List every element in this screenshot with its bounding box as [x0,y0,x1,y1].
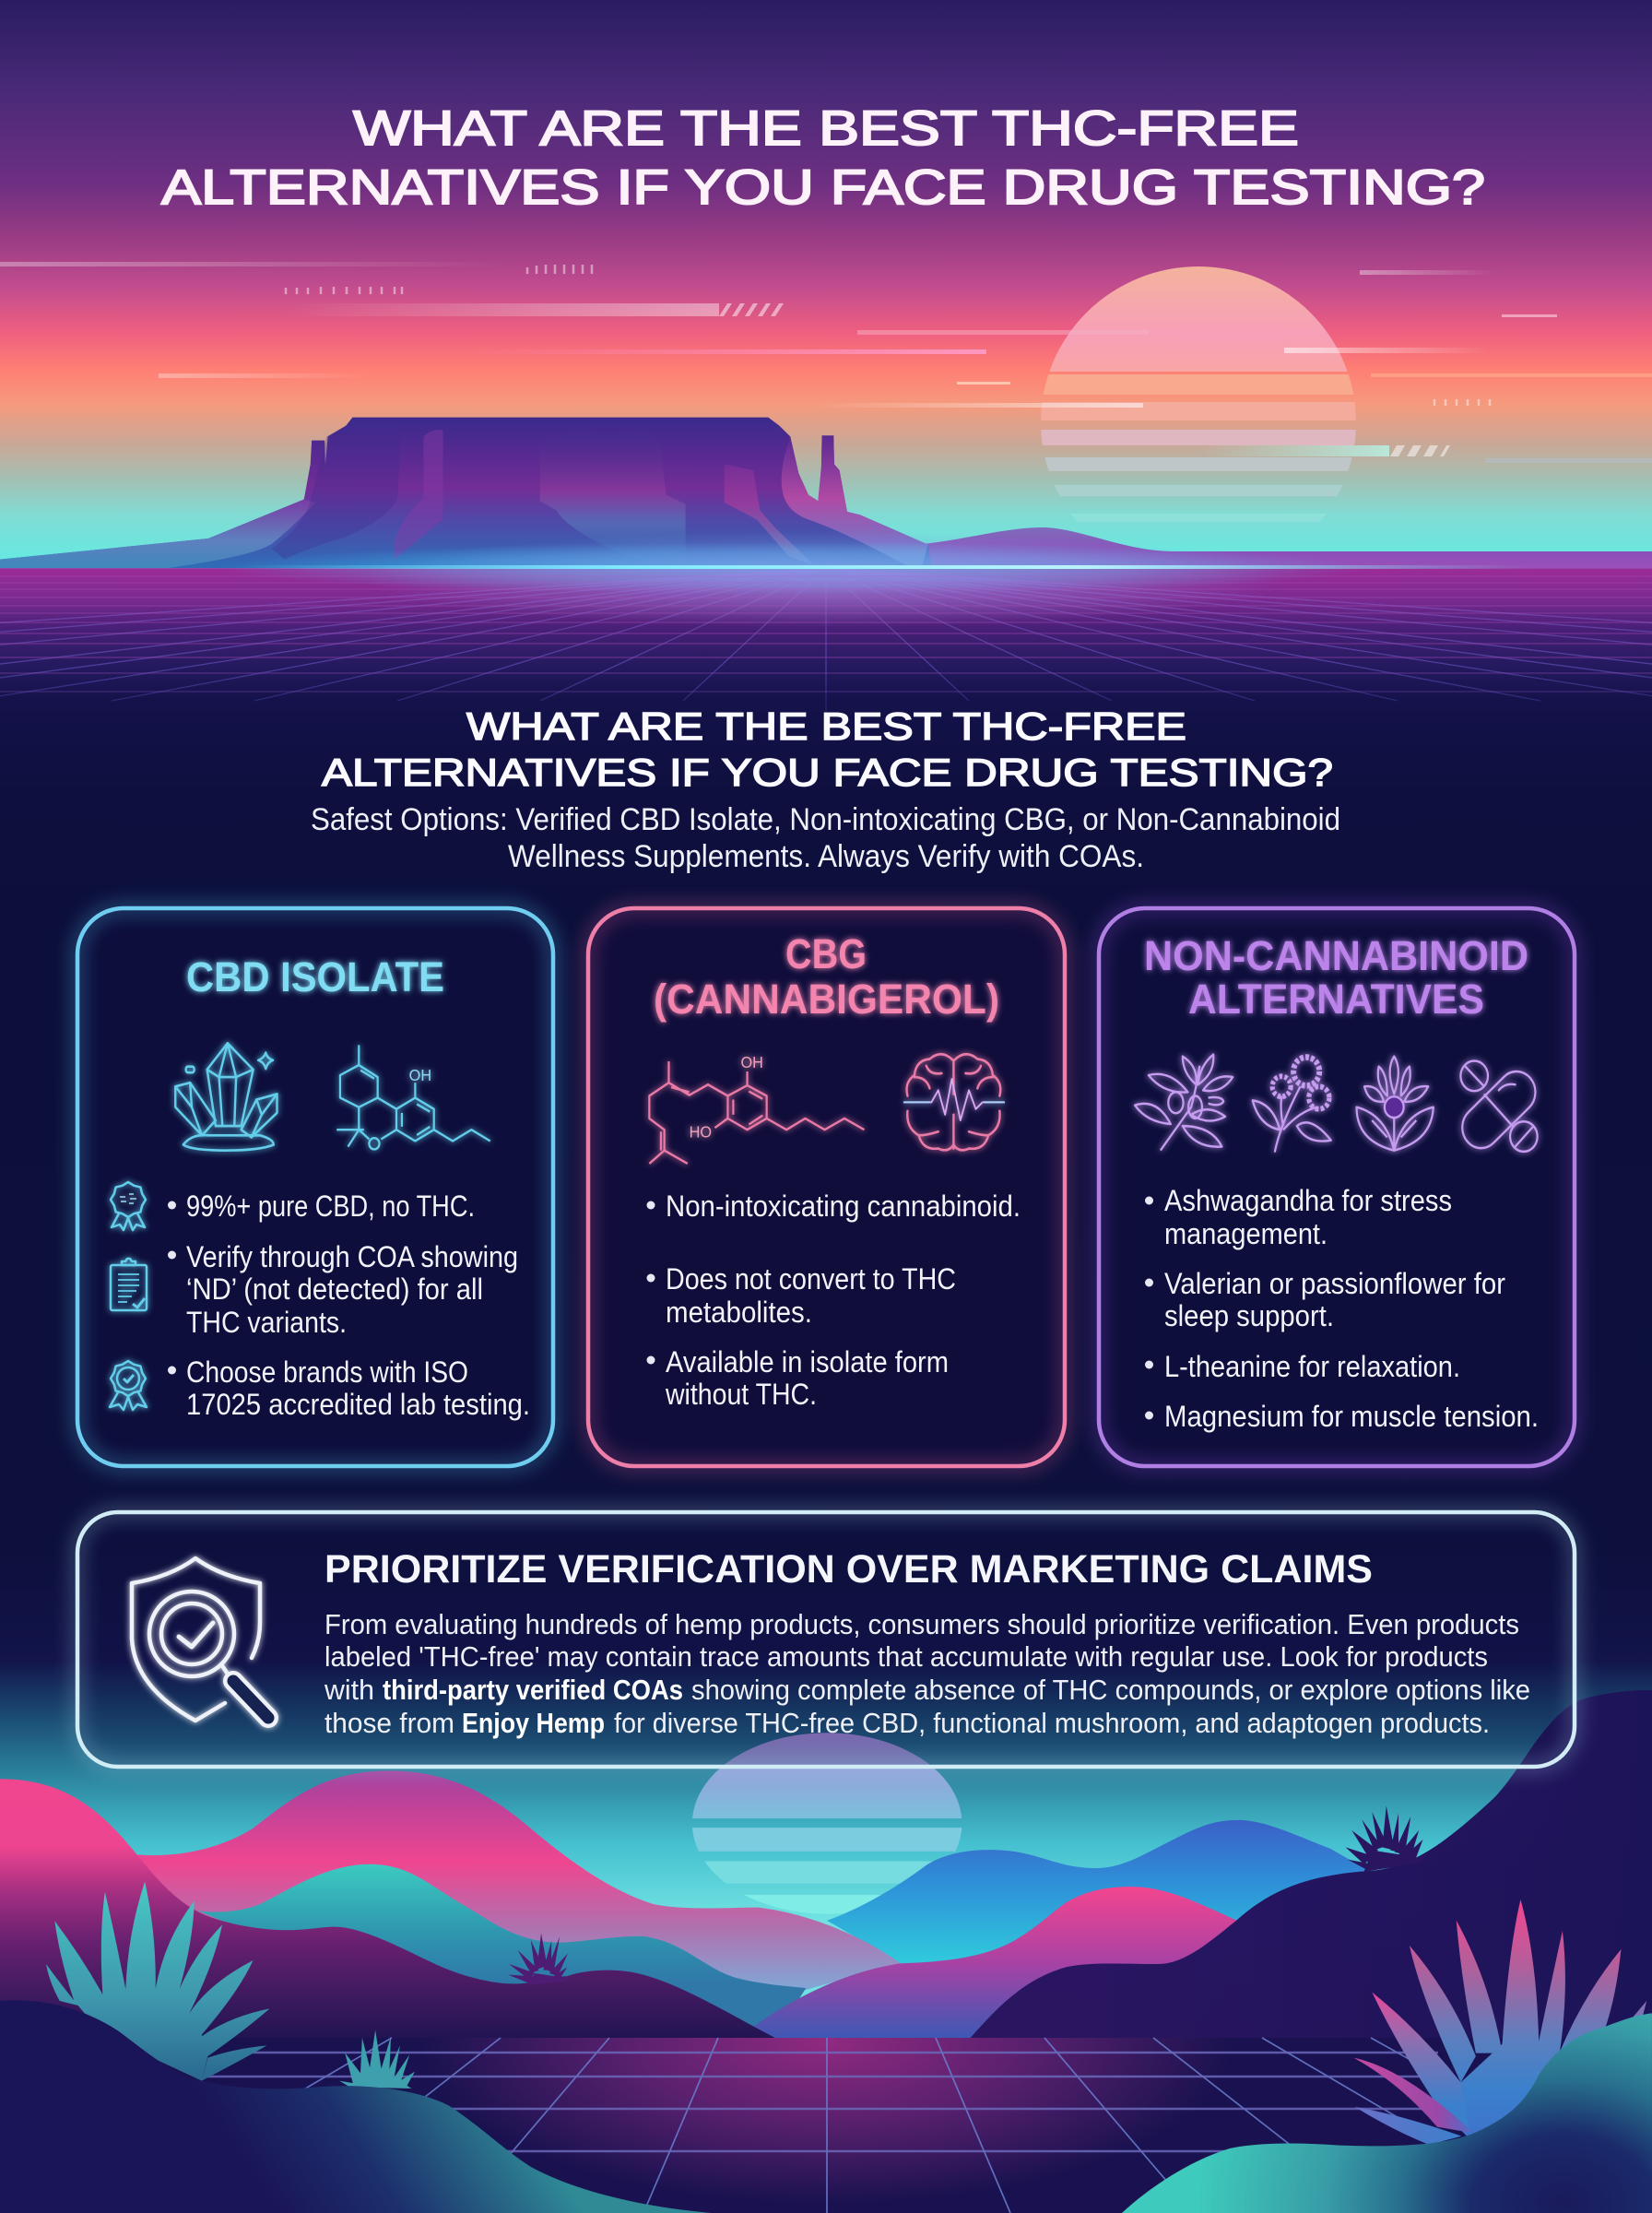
bullet list: sleep support. [1164,1299,1334,1332]
horizon bloom [221,542,1364,594]
bullet list: L-theanine for relaxation. [1164,1350,1460,1383]
heading [1144,932,1528,1023]
bullet list: Valerian or passionflower for [1164,1267,1505,1300]
callout body: third-party verified COAs [383,1674,683,1706]
callout body [324,1608,1530,1739]
section heading: WHAT ARE THE BEST THC-FREE [466,704,1186,748]
panel: CBG [588,908,1065,1466]
bullet list: ‘ND’ (not detected) for all [186,1272,483,1306]
bullet list: Available in isolate form [666,1345,949,1379]
bottom left hill [0,2000,712,2213]
icon: crystal [175,1043,277,1151]
subtitle: Wellness Supplements. Always Verify with COAs. [508,839,1144,874]
bullet list [647,1189,1021,1411]
bullet list [168,1189,530,1421]
desert grid [0,568,1652,728]
small hill [922,527,1652,568]
icon: brain [904,1054,1004,1150]
callout body: From evaluating hundreds of hemp products, consumers should prioritize verification. Even products [324,1608,1519,1640]
icon: valerian [1253,1057,1331,1153]
callout frame [77,1512,1575,1767]
title [161,101,1485,215]
subtitle: Safest Options: Verified CBD Isolate, Non-intoxicating CBG, or Non-Cannabinoid [311,802,1340,837]
bullet list: Magnesium for muscle tension. [1164,1400,1539,1433]
heading: ALTERNATIVES [1188,976,1484,1023]
title: WHAT ARE THE BEST THC-FREE [353,101,1299,156]
callout body: for diverse THC-free CBD, functional mushroom, and adaptogen products. [614,1707,1490,1739]
icon: CBG molecule [649,1052,864,1164]
panel: CBD isolate [77,908,553,1466]
teal hill [197,1864,806,2038]
section heading [322,704,1333,794]
lower sun [685,1731,969,1918]
icon: accredited seal [110,1361,147,1410]
icon: passionflower [1357,1057,1434,1151]
plants and foreground right [1122,1805,1652,2213]
callout body: labeled 'THC-free' may contain trace amounts that accumulate with regular use. Look for products [324,1640,1488,1673]
blue hills [827,1820,1370,1963]
bottom landscape [0,1690,1652,2213]
icon: capsule and pills [1455,1061,1543,1156]
sky streaks [0,262,1652,463]
plants and foreground left [0,1882,712,2213]
card frame [1099,908,1575,1466]
callout heading: PRIORITIZE VERIFICATION OVER MARKETING CLAIMS [324,1547,1373,1592]
dark right plant [1346,1805,1427,1872]
icon: certificate seal [111,1182,146,1230]
icon: ashwagandha branch [1135,1055,1233,1151]
bullet list: Ashwagandha for stress [1164,1184,1452,1217]
icon: CBD molecule: OH [409,1065,431,1084]
bullet list: management. [1164,1217,1328,1250]
card frame [588,908,1065,1466]
right pink hill [738,1887,1238,2039]
icon: shield with magnifier [132,1558,268,1721]
icon: CBG molecule: HO [690,1122,712,1142]
left hill [0,1779,774,2039]
icon: CBG molecule: OH [741,1052,763,1071]
card frame [77,908,553,1466]
callout body: those from [324,1707,454,1739]
horizon line [240,565,1530,569]
bullet list: Verify through COA showing [186,1240,518,1273]
ground glow [365,531,1287,627]
icon: CBD molecule [336,1045,490,1149]
callout body: with [324,1674,374,1706]
heading: CBG [785,930,867,977]
heading: NON-CANNABINOID [1144,932,1528,979]
bullet list [1145,1184,1539,1433]
small teal plant [339,2030,415,2089]
subtitle [311,802,1340,874]
right hill shading [1067,1690,1652,2213]
callout body: Enjoy Hemp [462,1707,605,1739]
heading: (CANNABIGEROL) [654,976,999,1023]
sun [1032,263,1364,522]
title: ALTERNATIVES IF YOU FACE DRUG TESTING? [161,160,1485,215]
heading [654,930,999,1023]
section heading: ALTERNATIVES IF YOU FACE DRUG TESTING? [322,751,1333,794]
bullet list: Does not convert to THC [666,1262,956,1296]
bullet list: without THC. [665,1378,817,1411]
bullet list: Choose brands with ISO [186,1355,468,1389]
mesa [0,418,931,568]
callout: prioritize verification [77,1512,1575,1767]
floor grid [0,2038,1652,2213]
bullet list: Non-intoxicating cannabinoid. [666,1189,1021,1223]
back hills and lower sun [0,1689,1652,2038]
left agave plant [46,1882,269,2081]
pink hill [137,1770,901,1993]
dark centre plant [508,1934,570,1985]
callout body: showing complete absence of THC compounds, or explore options like [691,1674,1530,1706]
bullet list: metabolites. [666,1296,812,1329]
icon: clipboard [111,1259,147,1310]
top landscape [0,262,1652,728]
bullet list: THC variants. [186,1306,347,1339]
right dark hill [969,1690,1652,2213]
bullet list: 17025 accredited lab testing. [186,1388,530,1421]
heading: CBD ISOLATE [186,953,444,1000]
panel: non-cannabinoid alternatives [1099,908,1575,1466]
bullet list: 99%+ pure CBD, no THC. [186,1189,475,1223]
bottom right hill [1122,2013,1652,2213]
right agave plant [1353,1899,1646,2145]
